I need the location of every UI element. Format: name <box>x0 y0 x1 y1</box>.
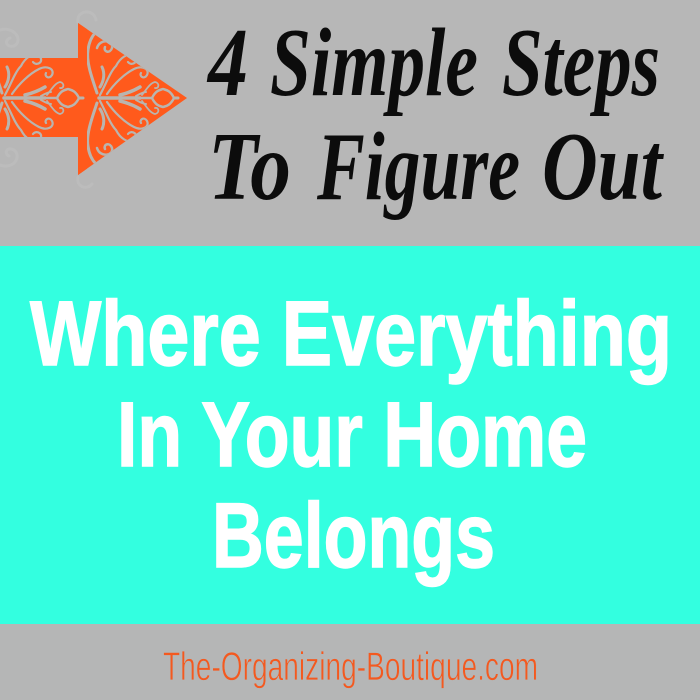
footer website text: The-Organizing-Boutique.com <box>163 645 538 689</box>
main title: Where Everything In Your Home Belongs: In Your Home <box>117 384 587 486</box>
icon: orange ornamental arrow <box>0 22 187 176</box>
main title: Where Everything In Your Home Belongs: Belongs <box>212 485 495 587</box>
heading: 4 Simple Steps To Figure Out <box>206 9 664 221</box>
bottom gray panel <box>0 624 700 700</box>
heading: 4 Simple Steps To Figure Out: Figure <box>316 113 520 221</box>
top gray panel <box>0 0 700 246</box>
main title: Where Everything In Your Home Belongs <box>30 283 672 587</box>
heading: 4 Simple Steps To Figure Out: To <box>208 113 291 221</box>
teal panel <box>0 246 700 624</box>
faint background swirls <box>0 12 96 187</box>
heading: 4 Simple Steps To Figure Out: Out <box>542 113 664 221</box>
heading: 4 Simple Steps To Figure Out: 4 <box>206 9 248 117</box>
heading: 4 Simple Steps To Figure Out: Simple <box>270 9 478 117</box>
